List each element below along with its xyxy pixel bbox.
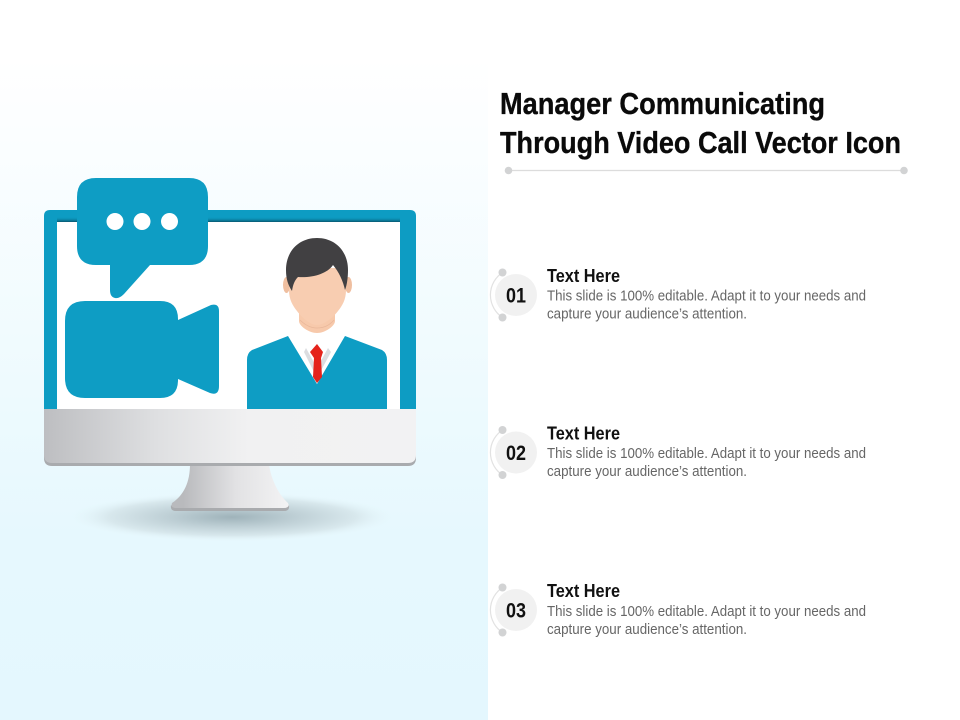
monitor frame <box>44 210 416 409</box>
number badge 02: 02 <box>506 442 526 465</box>
text block 02: Text Here <box>547 424 620 444</box>
number badge 01 <box>490 268 537 322</box>
text block 02: This slide is 100% editable. Adapt it to your needs and <box>547 445 866 462</box>
text block 01 <box>547 266 866 322</box>
monitor stand <box>171 464 289 511</box>
number badge 03 <box>490 584 537 636</box>
item 01 <box>490 266 866 322</box>
text block 01: This slide is 100% editable. Adapt it to your needs and <box>547 288 866 304</box>
item 03 <box>490 581 866 638</box>
title divider <box>505 167 908 174</box>
text block 03: capture your audience’s attention. <box>547 621 747 638</box>
title: Manager Communicating <box>500 86 825 121</box>
monitor shadow <box>67 492 397 542</box>
icon: desktop monitor <box>44 210 416 542</box>
text block 01: capture your audience’s attention. <box>547 306 747 322</box>
title: Through Video Call Vector Icon <box>500 125 901 160</box>
text block 03: This slide is 100% editable. Adapt it to your needs and <box>547 603 866 620</box>
text block 01: Text Here <box>547 266 620 286</box>
ears <box>283 277 290 293</box>
monitor screen <box>57 222 400 409</box>
neck <box>299 305 335 333</box>
text block 02: capture your audience’s attention. <box>547 463 747 480</box>
number badge 02 <box>490 426 537 479</box>
title <box>500 86 901 160</box>
shirt collar <box>288 322 346 385</box>
hair <box>286 238 348 291</box>
icon: video camera <box>65 301 219 398</box>
text block 02 <box>547 424 866 480</box>
monitor chin <box>44 409 416 466</box>
item 02 <box>490 424 866 480</box>
face <box>289 268 346 325</box>
number badge 03: 03 <box>506 600 526 622</box>
text block 03 <box>547 581 866 638</box>
red tie <box>310 344 323 383</box>
icon: manager portrait <box>247 238 387 409</box>
number badge 01: 01 <box>506 284 526 308</box>
jacket <box>247 336 387 409</box>
text block 03: Text Here <box>547 581 620 601</box>
left background panel <box>0 0 488 720</box>
icon: speech bubble <box>77 178 208 298</box>
